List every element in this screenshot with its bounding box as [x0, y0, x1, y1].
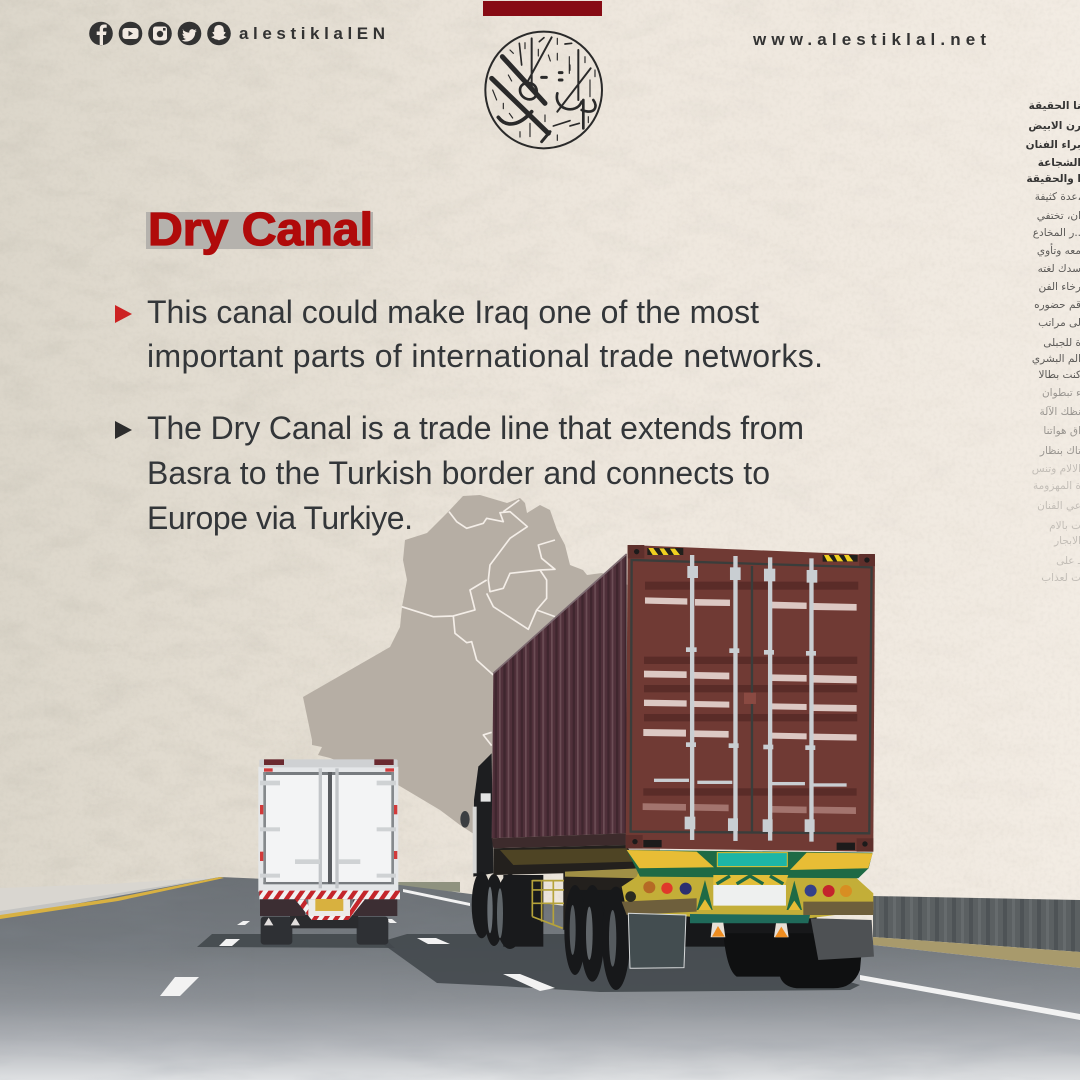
- newspaper column: Arabic text at right edge: رن الابيض: [1028, 120, 1080, 132]
- icon: instagram: [148, 22, 172, 45]
- newspaper column: Arabic text at right edge: عدة كثيفة،: [1035, 191, 1080, 203]
- newspaper column: Arabic text at right edge: الشجاعة: [1038, 157, 1080, 169]
- newspaper column: Arabic text at right edge: ت لعذاب: [1041, 572, 1080, 584]
- website url: www.alestiklal.net: [752, 30, 986, 49]
- hazard stripes: [647, 548, 858, 562]
- bullet 2 text: Basra to the Turkish border and connects to: [147, 455, 770, 491]
- newspaper column: Arabic text at right edge: اق هواتنا: [1043, 425, 1080, 437]
- background: newspaper paper: [0, 0, 885, 900]
- map of Iraq: [303, 495, 660, 880]
- title: Dry Canal: Dry Canal: [148, 203, 373, 255]
- newspaper column: Arabic text at right edge: الالام وتنس: [1032, 463, 1080, 475]
- newspaper column: Arabic text at right edge: قم حضوره: [1034, 299, 1080, 311]
- road surface: [0, 870, 1080, 1080]
- trailer wheels: [564, 885, 630, 990]
- reflector triangles: [711, 923, 789, 937]
- newspaper column: Arabic text at right edge: نا الحقيقة: [1029, 100, 1080, 112]
- under-trailer dark area: [573, 890, 817, 947]
- newspaper column: Arabic text at right edge: عي الفنان: [1037, 500, 1080, 512]
- white delivery truck: [258, 759, 400, 945]
- icon: snapchat: [207, 22, 231, 45]
- rear wheels: [723, 933, 863, 988]
- container side wall: [492, 555, 627, 838]
- door frame: [631, 560, 872, 833]
- road shadow: container truck: [380, 934, 860, 992]
- bullet 2 text: The Dry Canal is a trade line that extends from: [147, 410, 804, 446]
- road line: yellow edge: [0, 877, 224, 919]
- truck cab: [460, 753, 493, 877]
- newspaper column: Arabic text at right edge: الم البشري: [1032, 353, 1080, 365]
- newspaper column: Arabic text at right edge: معه وتأوي: [1037, 243, 1080, 257]
- newspaper column: Arabic text at right edge: ان، تختفي: [1037, 210, 1080, 222]
- mudflaps: [628, 913, 874, 968]
- icon: youtube: [119, 22, 142, 45]
- icon: facebook: [89, 22, 113, 45]
- road lines: white markings: [160, 889, 1080, 1020]
- social handle: alestiklalEN: [239, 24, 385, 43]
- bullet 1 text: This canal could make Iraq one of the most: [147, 294, 759, 330]
- rear bumper and lights: [622, 850, 873, 923]
- newspaper column: Arabic text at right edge: ا والحقيقة: [1026, 173, 1080, 185]
- social icons row: [89, 22, 231, 45]
- tractor wheels: [472, 872, 543, 949]
- chassis: [493, 845, 640, 930]
- bullet 1 text: [147, 294, 823, 374]
- newspaper column: Arabic text at right edge: لى مراتب: [1038, 317, 1080, 329]
- road shadow: white truck: [197, 934, 395, 948]
- icon: dark arrow: [115, 421, 132, 439]
- top red tab: [483, 1, 602, 16]
- newspaper column: Arabic text at right edge: ة المهزومة: [1033, 480, 1080, 492]
- roadside: curb and barrier: [0, 877, 1080, 968]
- newspaper column: Arabic text at right edge: براء الفنان: [1026, 139, 1080, 151]
- newspaper column: Arabic text at right edge: [1026, 100, 1080, 584]
- bullet 2: [115, 410, 804, 536]
- lock rods: [654, 555, 847, 842]
- logo: round calligraphy emblem: [485, 32, 602, 148]
- newspaper column: Arabic text at right edge: رخاء الفن: [1039, 281, 1080, 293]
- icon: red arrow: [115, 305, 132, 323]
- bullet 2 text: Europe via Turkiye.: [147, 500, 413, 536]
- corner castings: [626, 545, 875, 852]
- newspaper column: Arabic text at right edge: تاك بنظار: [1039, 445, 1080, 457]
- bullet 2 text: [147, 410, 804, 536]
- corrugation shadows: [643, 582, 858, 796]
- newspaper column: Arabic text at right edge: سدك لغته: [1038, 263, 1080, 275]
- container rear doors: [626, 545, 875, 852]
- icon: twitter: [178, 22, 201, 45]
- newspaper column: Arabic text at right edge: نظك الآلة: [1040, 405, 1080, 418]
- corrugation highlights: [643, 597, 857, 741]
- bullet 1 text: important parts of international trade networks.: [147, 338, 823, 374]
- bullet 1: [115, 294, 823, 374]
- newspaper column: Arabic text at right edge: ء تبطوان: [1042, 387, 1080, 399]
- container truck: [460, 545, 875, 990]
- newspaper column: Arabic text at right edge: ر المخادع..: [1033, 227, 1080, 239]
- newspaper column: Arabic text at right edge: كنت بطالا: [1038, 369, 1080, 381]
- newspaper column: Arabic text at right edge: ة للجبلى: [1043, 337, 1080, 349]
